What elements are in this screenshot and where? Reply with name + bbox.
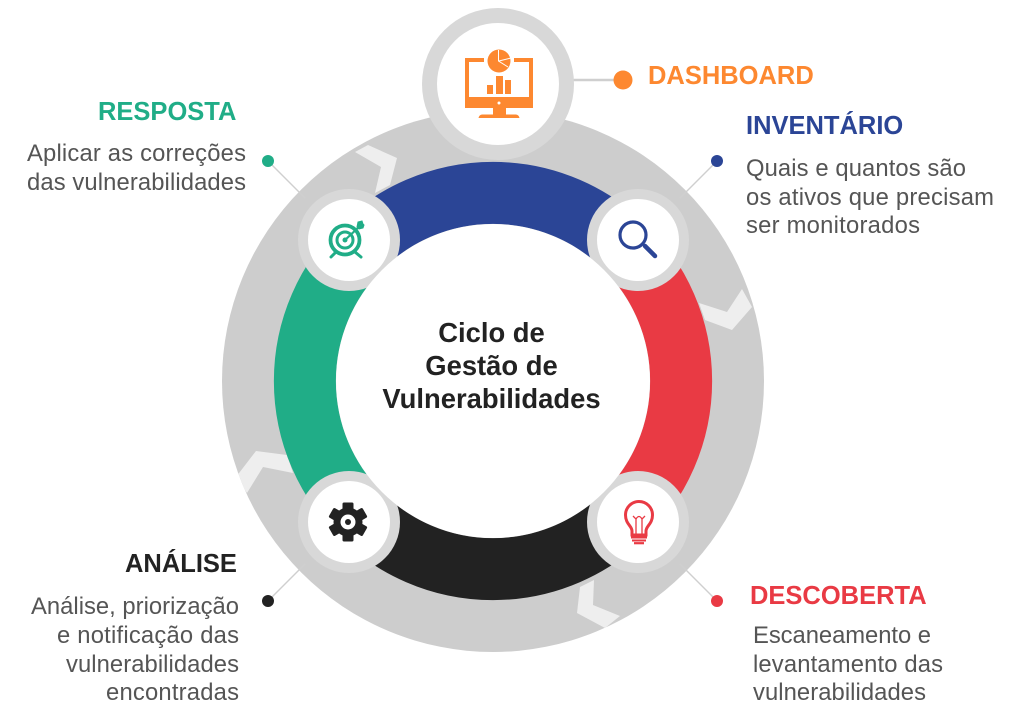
icon: light bulb	[626, 502, 652, 543]
label: resposta: das vulnerabilidades	[27, 169, 246, 196]
descoberta node with bulb icon	[587, 471, 689, 573]
icon: magnifier	[620, 222, 655, 256]
label: inventário: os ativos que precisam	[746, 184, 994, 211]
chevron arrows on disc	[236, 145, 752, 628]
label: análise: e notificação das	[57, 622, 239, 649]
label: inventário: Quais e quantos são	[746, 155, 966, 182]
segment: black	[360, 514, 626, 569]
icon: gear	[328, 502, 368, 542]
icon: target	[330, 221, 364, 257]
label: descoberta: vulnerabilidades	[753, 679, 926, 706]
cycle ring segments	[305, 193, 681, 569]
label: descoberta: DESCOBERTA	[750, 582, 927, 610]
análise node with gear icon	[298, 471, 400, 573]
label: descoberta	[711, 582, 943, 706]
label: resposta	[27, 98, 274, 196]
segment: green	[305, 248, 360, 514]
segment: red	[626, 248, 681, 514]
center title	[336, 224, 650, 538]
resposta node with target icon	[298, 189, 400, 291]
center title: Ciclo de	[438, 317, 545, 348]
label: dashboard: DASHBOARD	[648, 62, 814, 90]
label: análise: encontradas	[106, 679, 239, 706]
label: resposta: RESPOSTA	[98, 98, 236, 126]
center title: Vulnerabilidades	[382, 383, 601, 414]
label: análise: ANÁLISE	[125, 549, 237, 578]
label: análise: vulnerabilidades	[66, 651, 239, 678]
label: inventário: ser monitorados	[746, 212, 920, 239]
dashboard node with monitor icon	[422, 8, 574, 160]
label: inventário	[711, 111, 994, 239]
gray outer disc	[222, 110, 764, 652]
label: inventário: INVENTÁRIO	[746, 111, 903, 140]
segment: blue	[360, 193, 626, 248]
connector lines	[268, 80, 717, 601]
label: descoberta: levantamento das	[753, 651, 943, 678]
label: descoberta: Escaneamento e	[753, 622, 931, 649]
label: resposta: Aplicar as correções	[27, 140, 246, 167]
center title: Gestão de	[425, 350, 558, 381]
label: análise	[31, 549, 274, 706]
label: análise: Análise, priorização	[31, 593, 239, 620]
icon: monitor with charts	[465, 50, 533, 118]
inventário node with magnifier icon	[587, 189, 689, 291]
